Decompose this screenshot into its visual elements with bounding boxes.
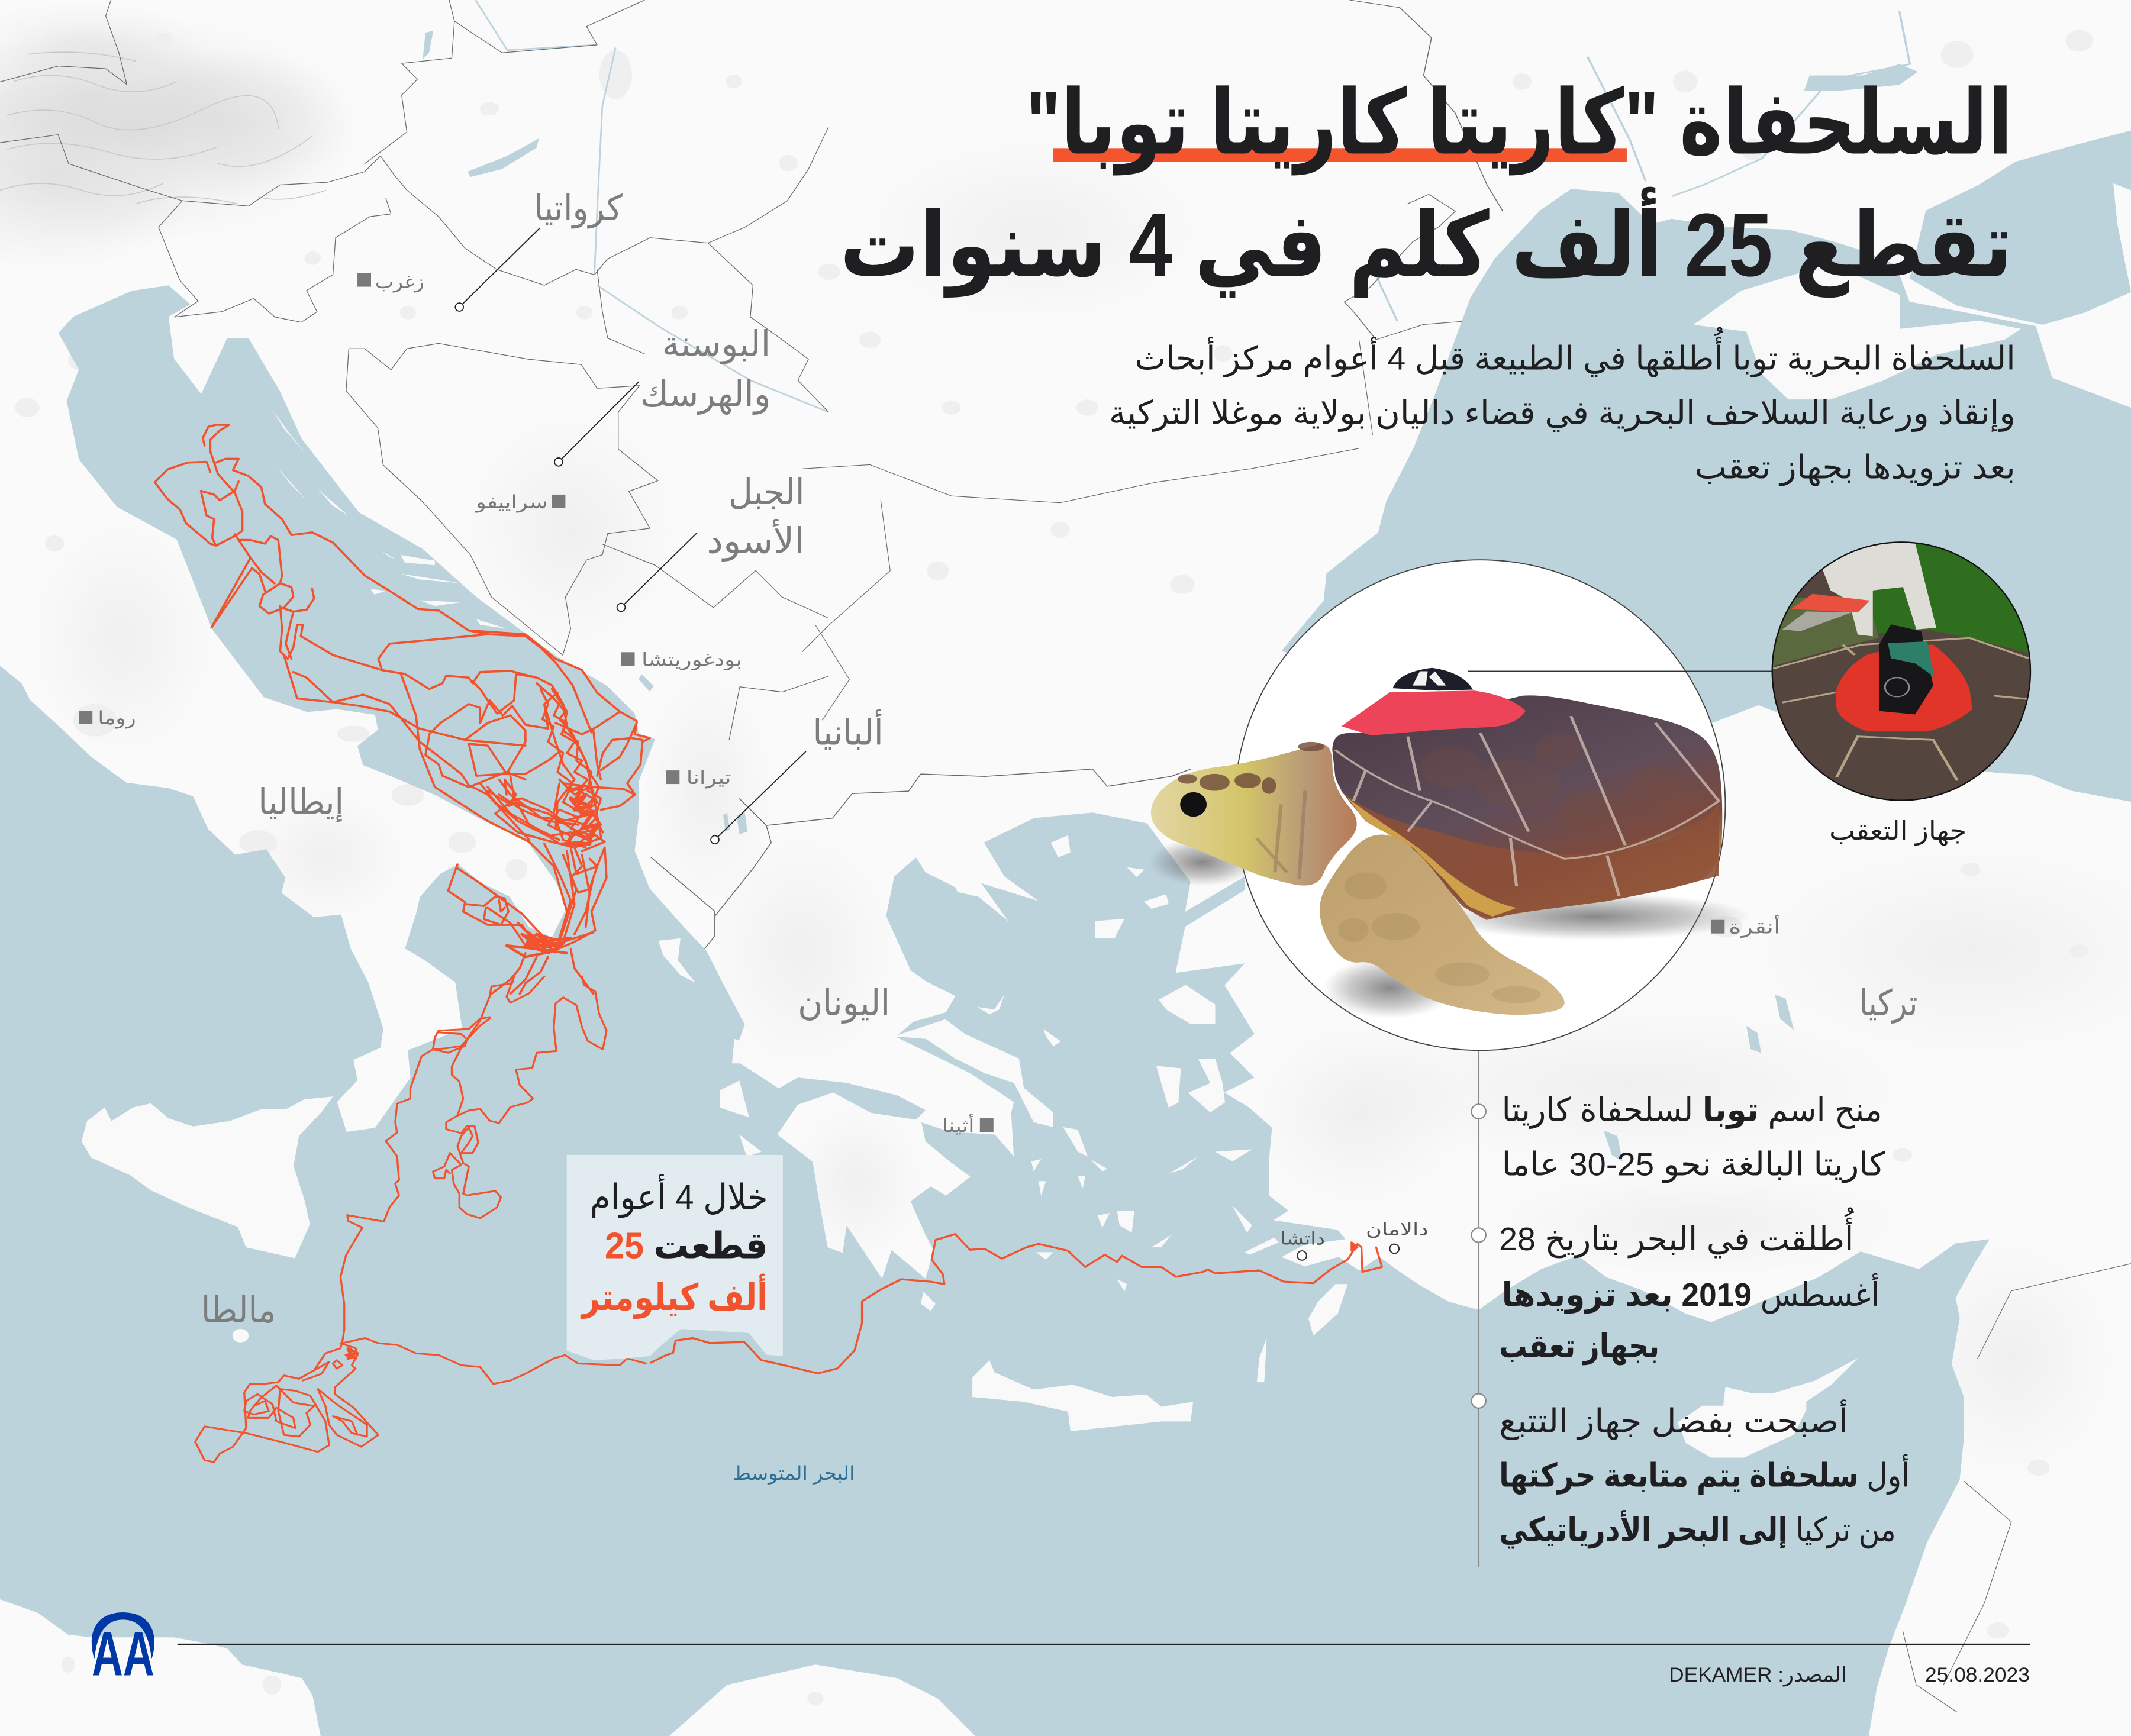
city: Tirana: تيرانا bbox=[686, 767, 731, 789]
fact 2 line 3: بجهاز تعقب bbox=[1499, 1328, 1659, 1366]
label: Montenegro line 2: الأسود bbox=[707, 519, 805, 562]
intro line 1: السلحفاة البحرية توبا أُطلقها في الطبيعة قبل 4 أعوام مركز أبحاث bbox=[1135, 326, 2016, 378]
turtle shell bbox=[1332, 695, 1722, 918]
city: Sarajevo: سراييفو bbox=[474, 492, 548, 513]
inset spatula bbox=[1782, 611, 1852, 631]
inset glove bbox=[1821, 543, 1936, 636]
city: Sarajevo bbox=[474, 492, 565, 513]
land: mountain texture in the Alps bbox=[0, 52, 326, 204]
place: Datca: داتشا bbox=[1280, 1230, 1325, 1249]
callout text line 3: ألف كيلومتر bbox=[580, 1273, 768, 1319]
label: tracking device: جهاز التعقب bbox=[1829, 817, 1966, 846]
city: Athens bbox=[942, 1114, 994, 1136]
footer rule bbox=[178, 1644, 2030, 1645]
intro line 2: وإنقاذ ورعاية السلاحف البحرية في قضاء داليان بولاية موغلا التركية bbox=[1109, 395, 2016, 433]
map: Aegean islands, Crete and Rhodes bbox=[659, 835, 1347, 1431]
track: Adriatic loops bbox=[155, 425, 650, 994]
source credit: المصدر: DEKAMER bbox=[1669, 1664, 1847, 1686]
label: Italy: إيطاليا bbox=[258, 782, 344, 823]
title underline bbox=[1053, 148, 1627, 162]
fact 3 line 3: من تركيا إلى البحر الأدرياتيكي bbox=[1499, 1510, 1896, 1549]
place: Datca bbox=[1280, 1230, 1325, 1260]
label: Bosnia: البوسنة bbox=[662, 324, 770, 365]
tracker inset border bbox=[1772, 542, 2030, 801]
city: Ankara: أنقرة bbox=[1729, 915, 1780, 938]
leader: Albania bbox=[711, 751, 806, 844]
place: Dalaman: دالامان bbox=[1366, 1220, 1429, 1240]
city: Tirana bbox=[666, 767, 731, 789]
map: Crimea bbox=[1693, 264, 2021, 399]
label: Turkey: تركيا bbox=[1859, 983, 1917, 1024]
callout box: 25 thousand km bbox=[567, 1155, 783, 1360]
map: rivers and inland lakes north bbox=[423, 0, 1918, 412]
logo: Anadolu Agency bbox=[92, 1612, 154, 1689]
city: Rome: روما bbox=[98, 708, 136, 729]
label: Malta: مالطا bbox=[201, 1290, 276, 1330]
inset black tracker bbox=[1879, 624, 1933, 714]
fact 2 line 1: أُطلقت في البحر بتاريخ 28 bbox=[1499, 1207, 1854, 1259]
city markers and labels bbox=[79, 272, 1780, 1260]
fact 3 line 2: أول سلحفاة يتم متابعة حركتها bbox=[1499, 1454, 1910, 1495]
turtle flipper mottling bbox=[1339, 872, 1540, 1003]
city: Zagreb bbox=[357, 272, 424, 293]
map: Black Sea and Sea of Azov bbox=[1282, 130, 2131, 802]
inset shell scutes bbox=[1773, 638, 2029, 780]
city: Athens: أثينا bbox=[942, 1114, 975, 1136]
city: Ankara bbox=[1711, 915, 1780, 938]
country labels bbox=[201, 188, 1917, 1330]
intro paragraph bbox=[1109, 326, 2016, 486]
leader: Croatia bbox=[455, 228, 540, 311]
callout text line 2: قطعت 25 bbox=[605, 1226, 768, 1267]
label: Croatia: كرواتيا bbox=[534, 188, 623, 229]
title bbox=[840, 73, 2013, 298]
map: inland lakes south bbox=[639, 674, 1794, 1162]
leader lines from countries bbox=[455, 228, 806, 844]
label: Herzegovina: والهرسك bbox=[640, 375, 770, 415]
turtle eye bbox=[1180, 792, 1207, 817]
fact 1 line 1: منح اسم توبا لسلحفاة كاريتا bbox=[1502, 1092, 1882, 1130]
tracker photo inset bbox=[1773, 543, 2030, 800]
city: Podgorica bbox=[621, 649, 742, 670]
turtle flipper bbox=[1320, 834, 1565, 1015]
turtle photo circle bbox=[1234, 560, 1725, 1050]
inset green background bbox=[1872, 543, 2029, 653]
turtle shell mottling bbox=[1420, 733, 1685, 831]
leader: Bosnia bbox=[554, 382, 639, 466]
inset teal tape bbox=[1888, 641, 1935, 677]
city: Podgorica: بودغوريتشا bbox=[641, 649, 742, 670]
map: Sicily and Malta bbox=[82, 1096, 333, 1343]
title line 2: تقطع 25 ألف كلم في 4 سنوات bbox=[840, 186, 2013, 298]
timeline bbox=[1471, 1049, 1486, 1567]
track: Ionian and Malta loops bbox=[195, 976, 646, 1462]
fact 1 line 2: كاريتا البالغة نحو 25-30 عاما bbox=[1502, 1145, 1885, 1183]
fact 3 line 1: أصبحت بفضل جهاز التتبع bbox=[1499, 1400, 1848, 1441]
turtle neck wrinkles bbox=[1257, 791, 1305, 879]
orange migration track bbox=[155, 425, 650, 1462]
turtle shadows bbox=[1148, 838, 1752, 1018]
map: sea (Mediterranean, Adriatic, Aegean) bbox=[0, 285, 1990, 1736]
turtle shell rim bbox=[1339, 788, 1719, 920]
label: Greece: اليونان bbox=[798, 983, 890, 1024]
connector line to tracker inset bbox=[1468, 671, 1774, 672]
place: Dalaman bbox=[1366, 1220, 1429, 1253]
city: Zagreb: زغرب bbox=[375, 272, 424, 293]
city: Rome bbox=[79, 708, 136, 729]
turtle tracker device bbox=[1392, 668, 1473, 690]
track: eastern leg from Turkey bbox=[651, 1234, 1382, 1373]
callout text line 1: خلال 4 أعوام bbox=[590, 1174, 768, 1218]
turtle scute lines bbox=[1335, 716, 1719, 896]
inset red epoxy bbox=[1835, 645, 1972, 731]
map: Cyprus bbox=[1678, 1358, 1858, 1457]
label: Albania: ألبانيا bbox=[813, 709, 884, 752]
label: Montenegro line 1: الجبل bbox=[728, 472, 805, 512]
fact 2 line 2: أغسطس 2019 بعد تزويدها bbox=[1502, 1273, 1879, 1314]
turtle head patches bbox=[1178, 742, 1324, 794]
fact list bbox=[1499, 1092, 1910, 1549]
logo: Anadolu Agency: AA bbox=[92, 1619, 154, 1689]
date: 25.08.2023 bbox=[1925, 1664, 2030, 1686]
label: Mediterranean Sea: البحر المتوسط bbox=[733, 1463, 855, 1485]
intro line 3: بعد تزويدها بجهاز تعقب bbox=[1695, 448, 2016, 486]
leader: Montenegro bbox=[617, 533, 697, 611]
map: Croatian islands bbox=[273, 410, 507, 628]
turtle head and neck bbox=[1151, 744, 1357, 886]
turtle illustration bbox=[1148, 668, 1752, 1018]
turtle red epoxy patch bbox=[1342, 690, 1526, 735]
